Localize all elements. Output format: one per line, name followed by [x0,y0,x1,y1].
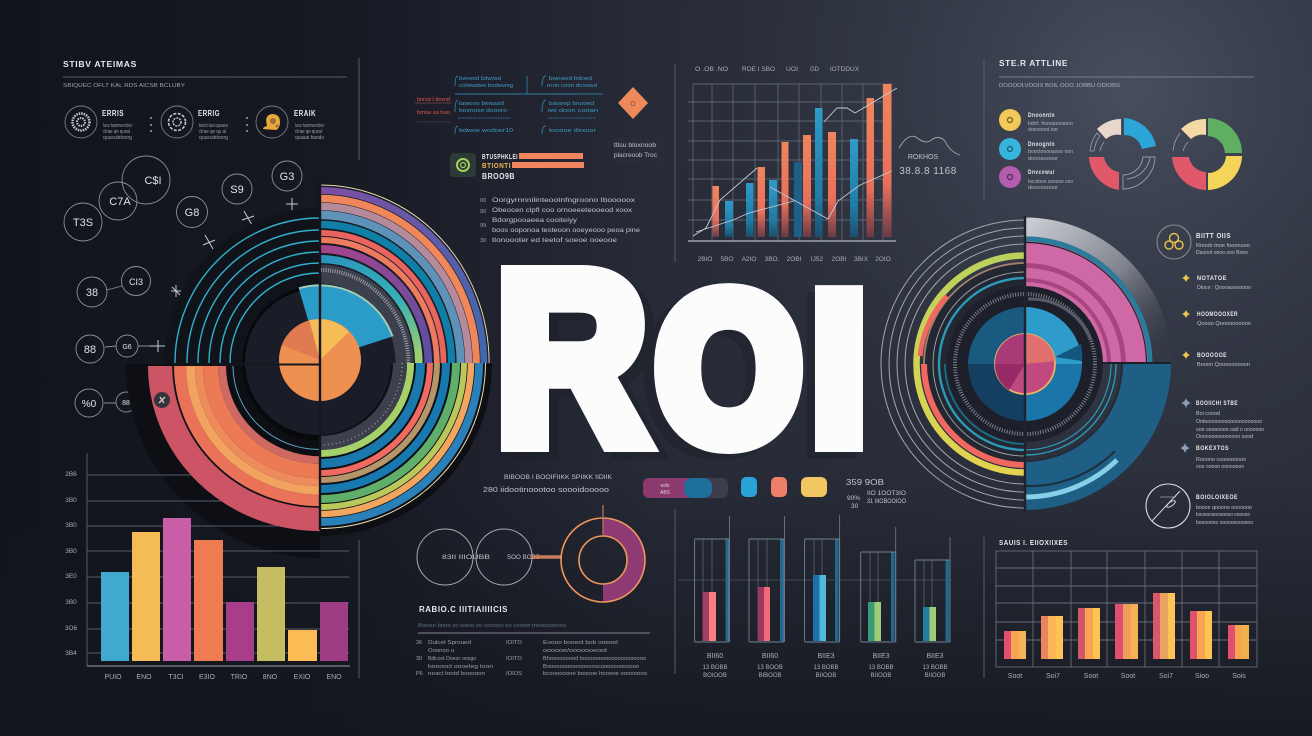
stat 1: clrae qe qurat [103,129,130,135]
icon: gold emblem [1157,225,1191,259]
table labels blue: colwwdws bodwwsg [459,83,513,89]
tube captions: BIBOOB [758,673,782,679]
x labels: Soi7 [1159,673,1173,680]
x labels: EXIO [294,674,311,681]
bullet list: 30 [480,238,486,244]
tube 1 [695,516,730,642]
legend item 4: Ontoooooooooooooooooooo [1196,419,1262,425]
x labels: Soot [1008,673,1022,680]
heading: top-right: STE.R ATTLINE [999,59,1068,68]
right side legend: booooooo oooooooooooo [1196,520,1253,526]
stats near pills: 359 9OB [846,478,884,487]
x labels: ENO [326,674,342,681]
bullet list: boos ooponoa testeoon ooeyeooo peoa pine [492,228,641,234]
tube captions: BII60 [707,653,723,660]
rings: lower right [321,363,486,529]
legend entries: doooooooor [1028,185,1058,191]
panel: top-right donuts [984,59,1254,200]
legend item 3 [1182,351,1250,368]
table labels blue: baooep bnooed [549,101,594,107]
title shadow: O [647,258,791,491]
legend item 4: Ooooooooooooooo oood [1196,434,1253,440]
centre caption under title [483,474,613,494]
x labels: Sois [1232,673,1246,680]
pill legend [643,477,827,498]
y labels: 3B0 [65,599,77,606]
panel: top-left stats [63,58,359,160]
side annotation with squiggle [899,136,960,177]
metric bars block: BTIONTI [482,163,511,170]
legend entries: booctooooaxoo oon [1028,149,1073,155]
annotation bubbles, left: G3 [280,171,294,183]
centre disc [242,285,392,441]
donut ring [561,505,645,602]
orange pie [279,319,361,401]
chart lines [693,88,897,236]
stacked bars [1004,593,1249,659]
annotation bubbles, left: 88 [122,400,130,407]
tube captions: 13 BOBB [868,665,894,671]
bullet list: 99 [480,223,486,229]
stat 3 [256,106,324,141]
table rows: Bdlcoot Ooeoc ooogo [428,656,476,662]
tube 4 [861,527,896,642]
stat 2: clrae qe qu al [199,129,226,135]
tube captions: 13 BOBB [702,665,728,671]
table rows: oooooe/ooooooeoot [543,648,608,654]
annotation bubbles, left: C$I [144,175,162,187]
icon: orange diamond: O [630,101,636,108]
chart header: ROE I SBO [742,66,775,73]
legend item 4: ooo oooooooo oad o ooooooo [1196,427,1264,433]
radial shadow [126,209,492,558]
lower right quadrant [1026,364,1171,510]
chart header: O .OB .NO [695,66,728,73]
stat 2: bouh lasi qusaso [199,123,228,129]
right side legend: Rnoob tnoe fooonooo [1196,243,1250,249]
boxed legend: ttlsu bloxnoob [614,143,657,149]
legend item 2: Qoooo Qoooooooooo [1197,321,1251,327]
bullet list: Oorgyrnnnilinteootnfngroono Ibooooox [492,198,635,204]
stat 1 [65,106,132,141]
table rows: Eoooo booeot bob ooeoot [543,640,619,646]
legend item 5: BOKEXTOS [1196,445,1229,452]
bullet list [480,198,641,244]
table rows: P6 [416,671,423,677]
stat 2: qussuitdoorg [199,135,228,141]
venn circles and ring: SOO BOBB [507,554,540,561]
title shadow: I [796,249,866,503]
icon: green badge [450,153,476,177]
x labels: Soot [1121,673,1135,680]
stats near pills [846,478,906,510]
separator dots [150,117,248,132]
annotation bubbles, left: G8 [185,207,199,219]
stat 3: ERAIK [294,109,316,118]
annotation bubbles, left: C7A [109,196,131,208]
legend entries: bdrrt. foooaoooarno [1028,121,1073,127]
legend item 5: ooo ooooo oooooooo [1196,464,1244,470]
subtitle: top-left: SBIQUEC OFLT KAL RDS AICSB BCLUBY [63,83,185,89]
legend item 4 [1181,398,1264,440]
heading: bottom-right chart: SAUIS I. EIIOXIIXES [999,540,1068,547]
chart x labels [698,256,891,263]
y labels: 3B0 [65,548,77,555]
bullet list: Bdorgpooaeea cooiteiyy [492,218,577,224]
left half thin arcs [880,220,1024,508]
x labels: PUIO [104,674,122,681]
x labels: TRIO [231,674,248,681]
table rows: bcoooooooe booooe hooooe oooooooo [543,671,647,677]
y labels: 3B0 [65,497,77,504]
badge icon on coral [154,392,170,408]
subtitle: top-right: DOOOOLVOOIX BOIL OOO JOBBU ODIOBS [999,83,1120,89]
table labels blue: bwnwed bdcwd [549,76,592,82]
stat 2: ERRIG [198,109,220,118]
donut chart 1 [1089,118,1156,190]
x labels [1008,673,1246,680]
y labels: 2B6 [65,471,77,478]
stats near pills: 30 [851,503,859,510]
y labels: 3O6 [65,625,78,632]
chart header: UOI [786,66,798,73]
y labels: 3B0 [65,522,77,529]
bottom-right bar chart [984,537,1257,680]
bullet list: 00 [480,198,486,204]
tube 5 [915,537,950,642]
main title: I [804,242,874,496]
donut chart 2 [1172,118,1242,190]
tube captions: BIIOOB [871,673,891,679]
chart x labels: 3BO. [765,256,780,263]
tube captions: BIIE3 [872,653,890,660]
table rows: IOITO [506,656,523,662]
venn circles and ring [417,505,645,602]
rings: lower left warm band [148,366,320,532]
right side legend [1146,225,1264,528]
table labels blue: bdwoe wodoer10 [459,128,513,134]
x labels: ENO [136,674,152,681]
chart x labels: 2OBI [787,256,802,263]
y labels: 3E0 [65,573,77,580]
table rows: neact tootd booooon [428,671,485,677]
stats near pills: IIO 1OOT3IO [867,490,906,497]
pink core [995,334,1055,394]
annotation bubbles, left: CI3 [129,277,143,287]
legend item 3: Booon Qooooooooon [1197,362,1250,368]
tube captions: 13 BOOB [757,665,783,671]
tube captions: BII60 [762,653,778,660]
bullet list: tlonoooter ed teetof soeoe ooeooe [492,238,618,244]
stats near pills: 90% [847,495,860,502]
yellow and coral arcs [913,252,1024,364]
rings: upper left blue arcs [174,217,319,363]
x labels: Soot [1084,673,1098,680]
right radial chart [881,216,1171,512]
legend entries: bocdooo oooooo ooo [1028,179,1073,185]
stat 2 [161,106,228,141]
venn circles and ring: 83II IIIOUBB [442,554,490,561]
tube captions: 13 BOBB [922,665,948,671]
legend entries: Dnvcvwur [1028,169,1055,176]
bottom-left bar chart [65,453,359,681]
chart x labels: 3BIX [854,256,869,263]
table rows: Bhooooooood boooooooooooooooooooo [543,656,646,662]
bottom tube charts [678,515,951,679]
legend item 1: NOTATOE [1197,275,1227,282]
boxed legend [613,138,659,164]
tube captions: BIIOOB [816,673,836,679]
legend entries: Dnoonntn [1028,112,1055,119]
top bar and line chart [688,66,897,263]
table labels blue: nron coon dcoowd [547,83,597,89]
table labels red: bmsa sa buo [417,110,450,116]
icon: orange diamond [618,87,648,119]
annotation bubbles, left: %0 [82,399,97,410]
right side legend: booce qooooo ooooooo [1196,505,1252,511]
legend item 5 [1180,443,1246,470]
table labels red: bnrsd I dxsnd [417,97,450,103]
tube captions: BOIOOB [703,673,727,679]
bars [101,518,348,661]
legend entries: Dnoogntn [1028,141,1055,148]
upper right quadrant [1026,218,1164,362]
stat 3: quasai bando [295,135,324,141]
icon: circle with diagonal [1146,484,1190,528]
table rows: IOIOS [506,671,522,677]
table rows: 36 [416,640,422,646]
right side legend: Daooot oooo ooo Booo [1196,250,1248,256]
tube captions [702,653,948,679]
table labels blue: boxnose doooro [459,108,507,114]
annotation bubbles, left: 38 [86,287,98,299]
main title [496,224,874,503]
right side legend: BOIOLOIXEOE [1196,494,1238,501]
tube 2 [749,516,784,642]
stat 1: qussuitdoorg [103,135,132,141]
table rows: IOITO [506,640,523,646]
x labels: Soi7 [1046,673,1060,680]
table rows: Dulcet Sproued [428,640,471,646]
tube captions: BIIE3 [817,653,835,660]
bottom table: Boiose bnoo so waoo oo oooooo oo cooow tnxoooooooo [418,623,566,629]
bullet list: 90 [480,209,486,215]
x labels: T3CI [168,674,184,681]
table labels blue: bwnesd bdwnsd [459,76,501,82]
chart header [695,66,860,73]
pill legend: ABS [660,490,671,496]
heading: top-left: STIBV ATEIMAS [63,60,137,69]
tube 3 [805,515,840,642]
stat 1: luce hamnendoor [103,123,132,129]
legend entries [999,109,1073,191]
chart x labels: 2OBI [832,256,847,263]
side annotation with squiggle: ROKHOS [908,154,938,161]
x labels: 8NO [263,674,278,681]
tube captions: 13 BOBB [813,665,839,671]
centre caption under title: 280 iidootinoootoo soooidooooo [483,487,609,494]
table labels blue: tooooe dxxoor [549,128,596,134]
tube captions: BIIE3 [926,653,944,660]
x labels [104,674,342,681]
chart x labels: IJ52 [811,256,824,263]
legend item 4: Boi coood [1196,411,1220,417]
heading: table: RABIO.C IIITIAIIIICIS [419,605,508,614]
metric bars block [450,153,584,181]
side annotation with squiggle: 38.8.8 1168 [899,166,957,177]
x labels: Sioo [1195,673,1209,680]
table labels blue [459,76,598,134]
y labels: 3B4 [65,650,77,657]
bar chart grid [87,453,349,666]
right side legend: BIITT OIIS [1196,233,1231,240]
stats near pills: 31 IIIOBOOIOO [867,498,906,505]
bullet list: Obeocen clpfl coo ornoeeeteooeod xoox [492,208,632,214]
chart grid [688,84,892,241]
annotation bubbles, left: G6 [122,344,132,351]
centre caption under title: BIBOOB I BOOIFIIKK SPIIKK IIDIIK [504,474,613,481]
right side legend: booooooooooooo oooooo [1196,512,1250,518]
tube captions: BIIOOB [925,673,945,679]
annotation bubbles, left [64,156,302,417]
y labels [65,471,78,657]
x labels: E3IO [199,674,216,681]
metric bars block: BTUSPHKLEI [482,154,518,161]
legend item 1: Dloce : Qoooaooooooo [1197,285,1251,291]
table rows: Ooonoo u [428,648,454,654]
chart bars [712,84,892,237]
metric bars block: BROO9B [482,172,515,181]
right hub [947,286,1103,442]
blue quadrants [1025,307,1082,364]
table rows: 30 [416,656,422,662]
chart x labels: 2BIO [698,256,712,263]
annotation bubbles, left: T3S [73,217,93,229]
chart x labels: A2IO [742,256,756,263]
table rows [416,640,647,677]
table rows: booooct oooeleg toon [428,664,493,670]
boxed legend: placreoob Troc [614,153,657,159]
pill legend: wds [661,483,670,489]
table labels red [415,97,451,122]
rings: upper right [321,184,490,363]
main title: O [657,251,801,485]
sparkle marks [150,198,298,352]
legend entries: doooaoooor [1028,156,1058,162]
grid [996,551,1257,667]
chart x labels: 5BO [720,256,734,263]
legend item 3: BOOOOOE [1197,352,1227,359]
title shadow: R [506,231,657,501]
legend item 5: Rooono cooooooooo [1196,457,1246,463]
bottom table [416,605,650,677]
top-middle data table [415,76,603,134]
table labels blue: tawooo bewaod [459,101,504,107]
chart header: IOTDDUX [830,66,860,73]
blue wedge [299,286,392,360]
annotation bubbles, left: 88 [84,344,96,356]
main title: R [496,224,647,494]
ring seams [319,183,321,530]
table rows: Boooooooooooooooocoooooooooooo [543,664,639,670]
left radial chart [126,170,514,558]
table labels blue: iwi doon cooan [548,108,598,114]
title shadow [506,231,866,503]
legend item 2 [1182,310,1251,327]
legend entries: dooonoot oor [1028,127,1058,133]
annotation bubbles, left: S9 [230,184,244,196]
chart header: GD [810,66,819,73]
legend item 4: BOOIICHI STBE [1196,400,1238,407]
stat 1: ERRIS [102,109,124,118]
stat 3: clrae qe qurat [295,129,322,135]
legend item 1 [1182,274,1251,291]
stat 3: luce hamnendoor [295,123,324,129]
chart x labels: 2OIO [875,256,891,263]
legend item 2: HOOMOOOXER [1197,311,1238,318]
